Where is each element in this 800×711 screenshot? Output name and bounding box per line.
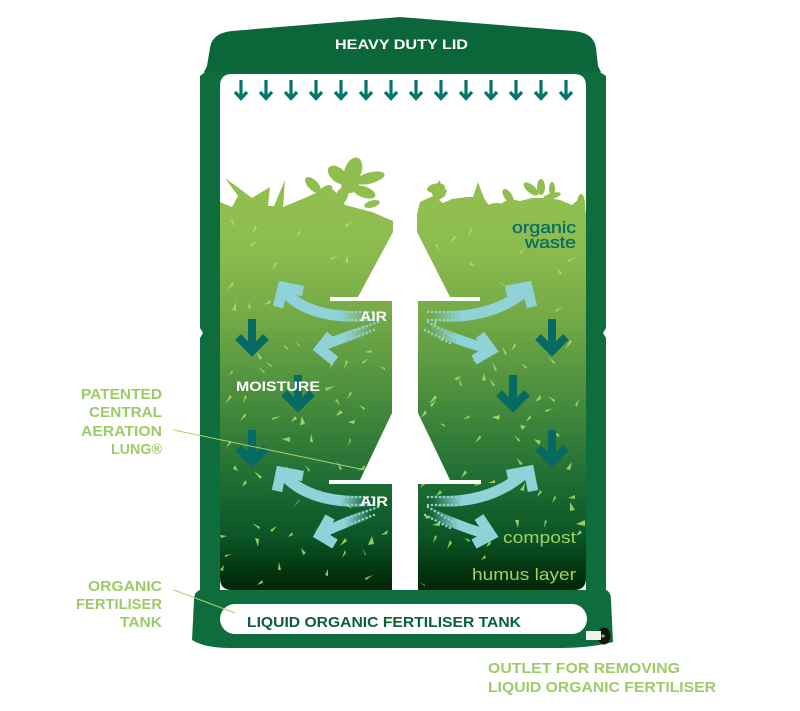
organic waste label: organic: [512, 218, 577, 237]
tank label: LIQUID ORGANIC FERTILISER TANK: [247, 614, 521, 631]
falling arrows row: [235, 80, 572, 98]
compost label: compost: [503, 528, 576, 547]
organic fertiliser tank callout: ORGANIC: [88, 578, 162, 595]
upper air arrows: [278, 287, 532, 361]
organic matter flecks: [220, 220, 585, 593]
compost mass with central aeration lung cut-out: [220, 212, 586, 593]
bin body: [200, 72, 606, 590]
vegetation left: [220, 155, 386, 218]
patented central aeration lung callout: AERATION: [81, 423, 162, 440]
air label upper: AIR: [360, 308, 387, 324]
vegetation right: [417, 179, 586, 222]
tank window: [220, 604, 587, 634]
patented central aeration lung callout: PATENTED: [81, 386, 162, 403]
patented central aeration lung callout: CENTRAL: [89, 404, 162, 421]
outlet callout: OUTLET FOR REMOVING: [488, 660, 680, 677]
outlet callout: [488, 660, 716, 696]
moisture arrows: [238, 319, 566, 462]
air label lower: AIR: [360, 493, 388, 509]
outlet tap: [586, 628, 610, 644]
white interior chamber: [220, 74, 586, 590]
organic fertiliser tank callout: FERTILISER: [76, 596, 162, 613]
composting bin infographic: [77, 17, 716, 695]
leader line: fertiliser tank: [174, 590, 235, 613]
humus layer label: humus layer: [472, 565, 576, 584]
organic fertiliser tank callout: TANK: [120, 614, 162, 631]
outlet callout: LIQUID ORGANIC FERTILISER: [488, 679, 716, 696]
patented central aeration lung callout: [81, 386, 162, 458]
fertiliser tank base: [192, 590, 613, 648]
organic waste label second line: waste: [524, 233, 576, 252]
lower air arrows: [277, 471, 533, 544]
moisture label: MOISTURE: [236, 378, 320, 394]
leader line: aeration lung: [174, 430, 365, 470]
heavy duty lid: [204, 17, 601, 72]
organic fertiliser tank callout: [76, 578, 162, 631]
lid label: HEAVY DUTY LID: [335, 36, 468, 52]
patented central aeration lung callout: LUNG®: [111, 441, 162, 458]
